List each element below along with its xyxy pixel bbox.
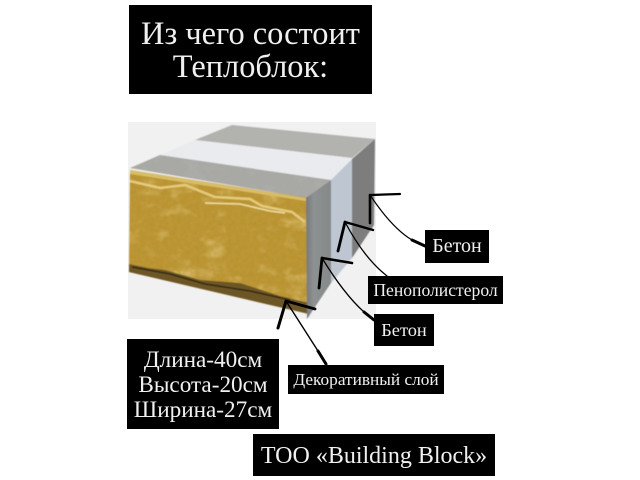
- top concrete back: [195, 125, 375, 158]
- block: [128, 122, 376, 319]
- dimensions: Длина-40см: [144, 347, 262, 373]
- label: foam: [368, 276, 503, 304]
- title: Теплоблок:: [173, 49, 328, 85]
- label: decorative layer: [288, 365, 444, 394]
- decorative face: [129, 170, 309, 314]
- company name: ТОО «Building Block»: [261, 443, 487, 469]
- dimensions: [127, 339, 279, 429]
- illustration: block cross-section with layer pointers: [128, 122, 425, 365]
- company name: [253, 434, 495, 476]
- dimensions: Ширина-27см: [134, 397, 272, 423]
- title: [129, 5, 372, 94]
- side foam: [331, 159, 352, 283]
- pointer: front concrete: [319, 258, 374, 320]
- dimensions: Высота-20см: [138, 372, 268, 398]
- side back concrete: [352, 139, 375, 258]
- label: decorative layer: Декоративный слой: [293, 370, 439, 389]
- photo background: [128, 122, 376, 319]
- label: front concrete: [374, 314, 434, 346]
- top concrete front: [130, 155, 331, 198]
- label: back concrete: Бетон: [432, 235, 482, 257]
- pointer: back concrete: [370, 194, 425, 246]
- top foam: [160, 140, 352, 180]
- title: Из чего состоит: [141, 16, 360, 52]
- label: back concrete: [425, 230, 489, 263]
- pointer: foam: [338, 222, 387, 276]
- pointer: decorative layer: [278, 301, 326, 364]
- side front concrete: [306, 180, 331, 319]
- label: foam: Пенополистерол: [373, 280, 498, 300]
- label: front concrete: Бетон: [381, 320, 427, 340]
